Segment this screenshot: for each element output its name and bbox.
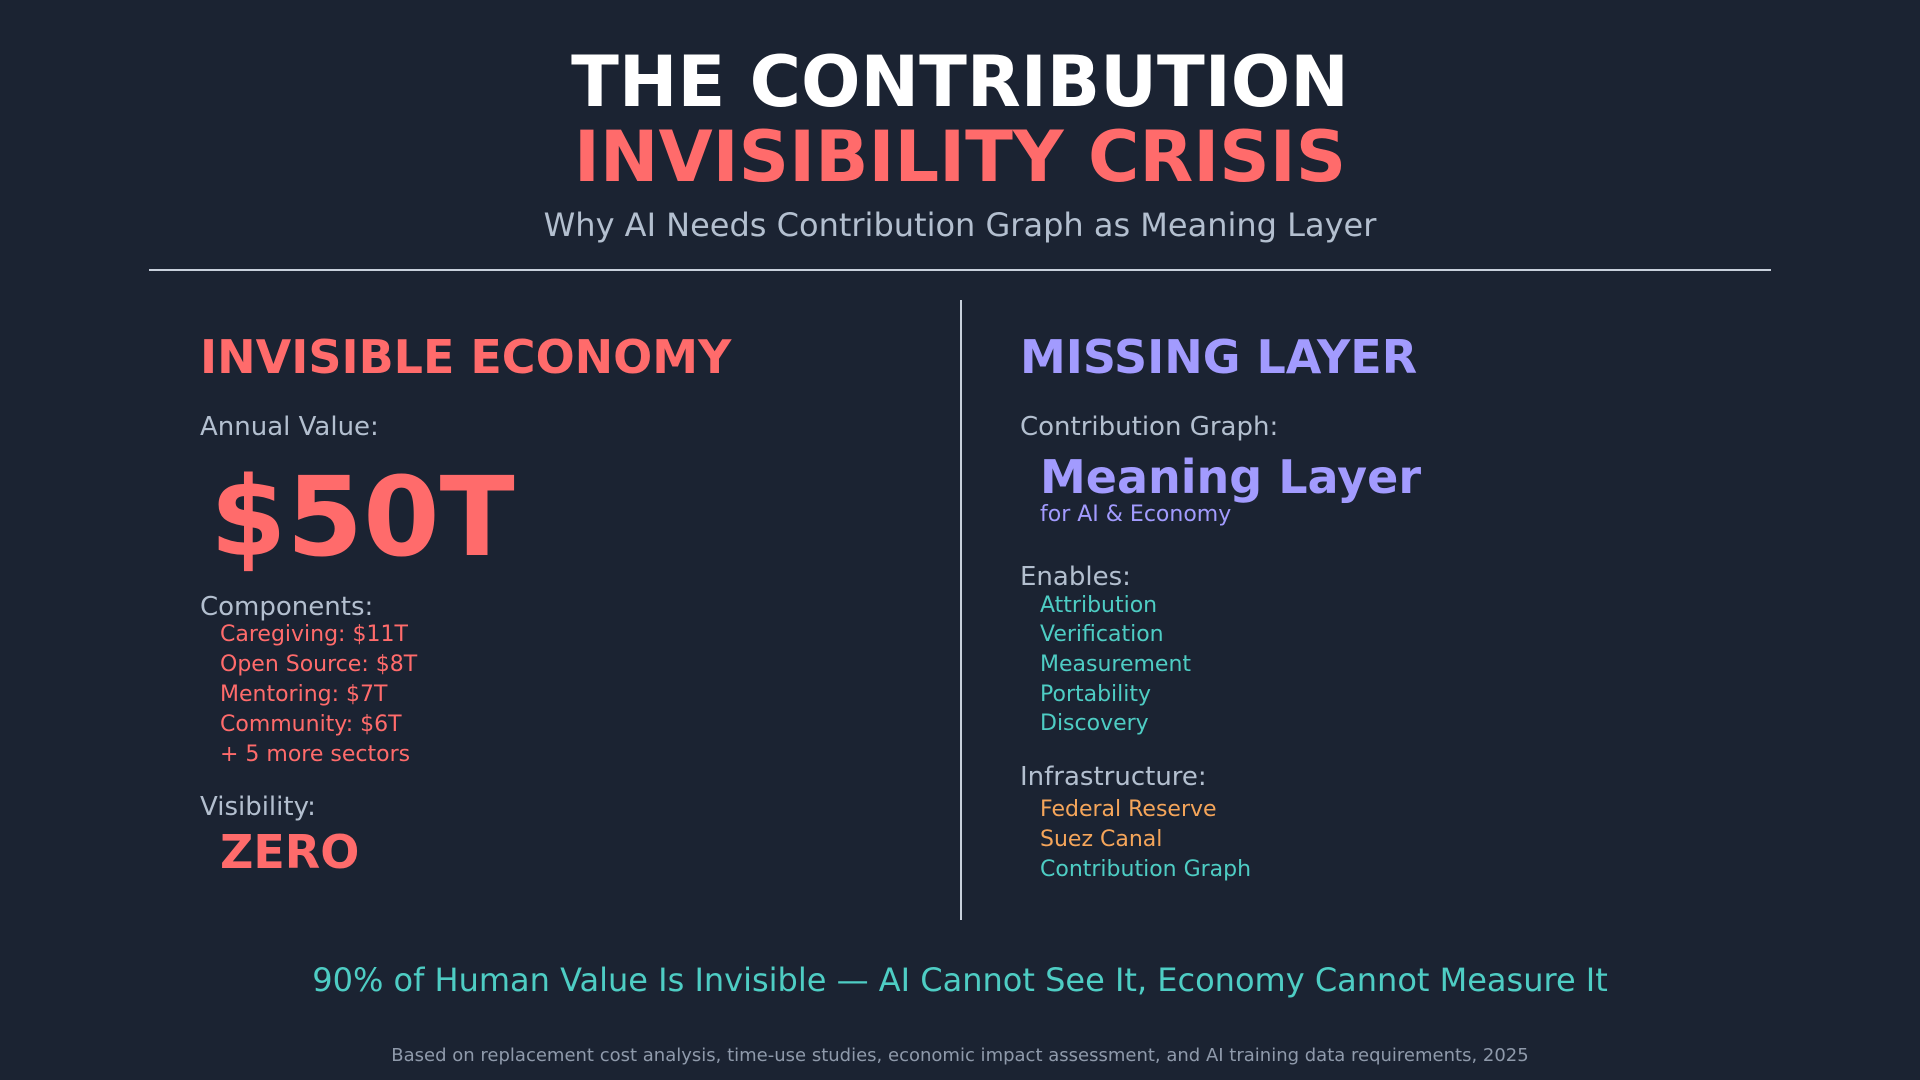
heading: invisible economy: INVISIBLE ECONOMY [200,330,731,384]
infrastructure list: Contribution Graph [1040,857,1251,882]
components list: Community: $6T [220,712,402,737]
enables list [1040,593,1191,736]
components list: Mentoring: $7T [220,682,387,707]
infrastructure list: Federal Reserve [1040,797,1217,822]
panel: invisible economy [200,330,732,879]
enables list: Measurement [1040,652,1191,677]
label: contribution graph: Contribution Graph: [1020,412,1278,442]
label: components: Components: [200,592,373,622]
zero: ZERO [220,825,359,879]
enables list: Verification [1040,622,1164,647]
label: visibility: Visibility: [200,792,316,822]
meaning layer: Meaning Layer [1040,450,1421,504]
sub: for AI & Economy: for AI & Economy [1040,502,1231,527]
label: annual value: Annual Value: [200,412,379,442]
enables list: Attribution [1040,593,1157,618]
subtitle: Why AI Needs Contribution Graph as Meaning Layer [544,206,1376,244]
components list [220,622,418,767]
title line 2: INVISIBILITY CRISIS [574,116,1346,198]
heading: missing layer: MISSING LAYER [1020,330,1417,384]
footer source: Based on replacement cost analysis, time-use studies, economic impact assessment, and AI training data requirements, 2025 [391,1045,1529,1066]
label: infrastructure: Infrastructure: [1020,762,1207,792]
title line 1: THE CONTRIBUTION [571,41,1349,123]
components list: + 5 more sectors [220,742,410,767]
infrastructure list [1040,797,1251,882]
big number: $50T [210,453,515,581]
infrastructure list: Suez Canal [1040,827,1162,852]
enables list: Discovery [1040,711,1149,736]
enables list: Portability [1040,682,1151,707]
bottom message: 90% of Human Value Is Invisible — AI Cannot See It, Economy Cannot Measure It [312,961,1608,999]
components list: Open Source: $8T [220,652,417,677]
panel: missing layer [1020,330,1421,882]
components list: Caregiving: $11T [220,622,408,647]
label: enables: Enables: [1020,562,1131,592]
